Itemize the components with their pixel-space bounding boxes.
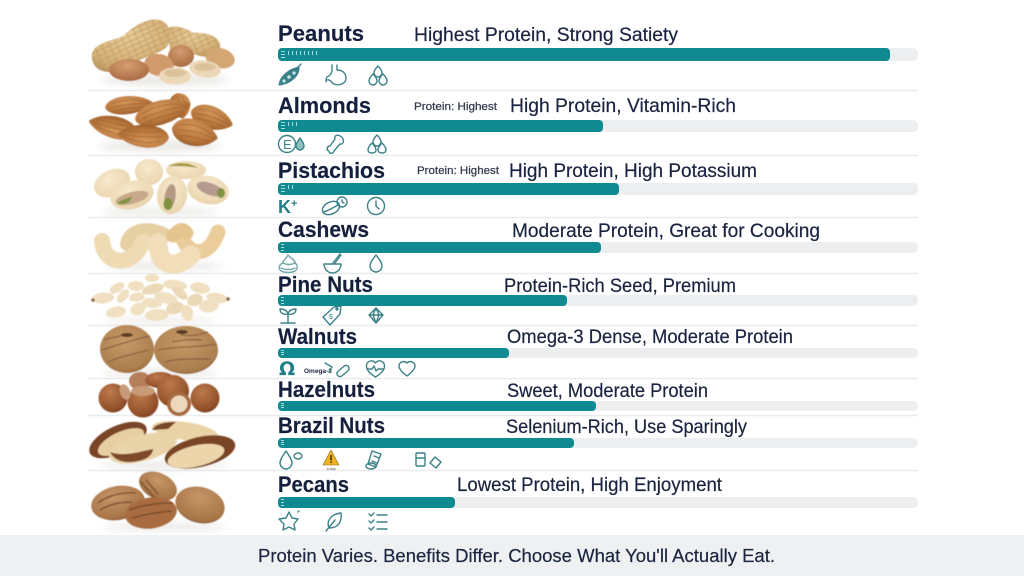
icon: omega-3 capsule: Omega-3 [304,368,332,375]
tag: protein highest: Protein: Highest [417,165,499,177]
image: walnuts [100,325,220,376]
icon: protein drops [369,66,387,85]
icon: leaf [326,513,341,531]
heading: walnuts: Walnuts [278,324,357,349]
icon: selenium drop [280,451,302,469]
tag: protein highest: Protein: Highest [414,101,497,113]
icon: bone [327,135,343,153]
bar: walnuts [278,348,918,358]
heading: peanuts: Peanuts [278,21,364,46]
icon: leaf and clock [320,197,347,217]
icon: price tag: $ [329,314,333,321]
icon: chocolate and nuts [366,451,381,469]
icon: clock [368,198,384,214]
image: almonds [86,91,237,152]
bar: pine nuts [278,295,918,306]
icon: cream [279,255,297,272]
row: peanuts [278,21,918,85]
icon: checklist [369,513,387,530]
bar: peanuts [278,48,918,61]
icon: star [279,511,299,530]
footer text: Protein Varies. Benefits Differ. Choose What You'll Actually Eat. [258,546,775,566]
icon: stomach [326,65,346,85]
row: almonds [278,93,918,153]
image: cashews [102,230,225,270]
icon: potassium: + [291,198,297,210]
image: pistachios [89,159,231,216]
bar: brazil nuts [278,438,918,448]
description: brazil nuts: Selenium-Rich, Use Sparingly [506,417,747,438]
icon: omega-3 capsule [304,363,350,378]
description: walnuts: Omega-3 Dense, Moderate Protein [507,327,793,348]
icon: omega: Ω [279,358,295,380]
image: pecans [88,466,229,532]
icon: bowl with whisk [324,254,341,273]
bar: almonds [278,120,918,132]
icon: bar and nut [416,453,441,468]
bar: pecans [278,497,918,508]
bar: hazelnuts [278,401,918,411]
icon: protein drops [368,135,386,153]
icon: vitamin E [278,136,304,152]
heading: pine nuts: Pine Nuts [278,272,373,297]
image: hazelnuts [98,372,220,418]
icon: price tag [323,306,341,325]
row: hazelnuts [278,377,918,411]
description: pine nuts: Protein-Rich Seed, Premium [504,276,736,297]
row: walnuts [278,324,918,380]
row: pecans [278,472,918,531]
row: brazil nuts [278,413,918,471]
heading: cashews: Cashews [278,217,369,242]
description: hazelnuts: Sweet, Moderate Protein [507,381,708,402]
row: pistachios [278,158,918,217]
row: pine nuts [278,272,918,325]
heading: almonds: Almonds [278,93,371,118]
description: peanuts: Highest Protein, Strong Satiety [414,25,678,46]
description: pecans: Lowest Protein, High Enjoyment [457,475,723,496]
warning icon [323,450,339,471]
icon: diamond [369,308,383,323]
heading: pecans: Pecans [278,472,349,497]
heading: pistachios: Pistachios [278,158,385,183]
icon: pea pod [279,64,301,85]
icon: sprout [280,309,296,323]
description: almonds: High Protein, Vitamin-Rich [510,96,736,117]
image: pine nuts [91,274,230,324]
image: peanuts [92,19,237,85]
icon: heart with pulse [366,361,384,377]
icon: vitamin E: E [283,137,292,152]
icon: heart [399,362,415,376]
footer banner [0,535,1024,576]
icon: oil drop [370,255,382,272]
description: pistachios: High Protein, High Potassium [509,161,757,182]
row: cashews [278,217,918,273]
bar: cashews [278,242,918,253]
heading: brazil nuts: Brazil Nuts [278,413,385,438]
icon: potassium: K [278,197,291,217]
heading: hazelnuts: Hazelnuts [278,377,375,402]
description: cashews: Moderate Protein, Great for Cooking [512,221,820,242]
image: brazil nuts [84,414,238,475]
bar: pistachios [278,183,918,195]
warning icon: 1/day [326,466,336,471]
